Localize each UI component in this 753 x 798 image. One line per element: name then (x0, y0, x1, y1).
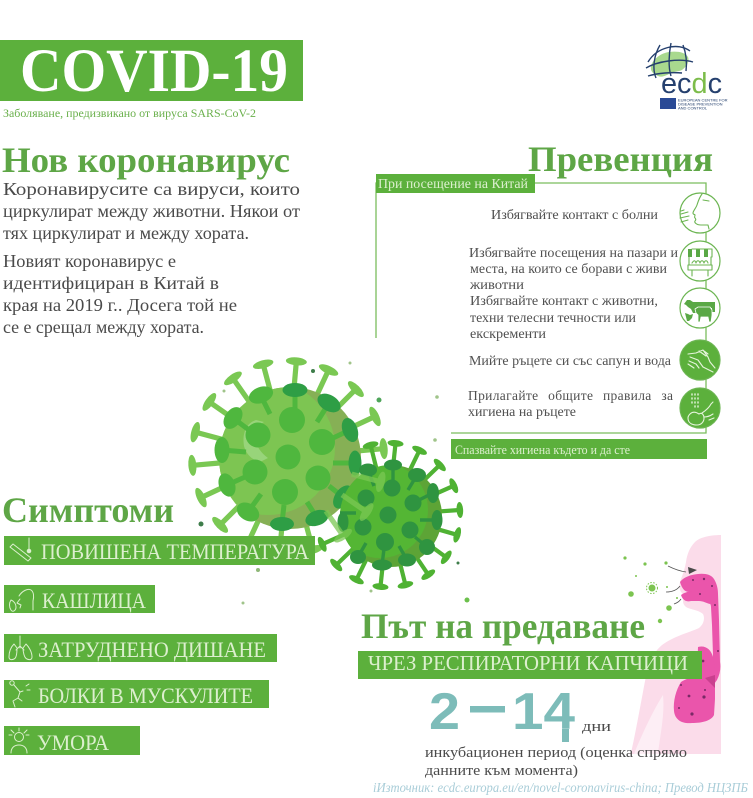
symptom: muscle pain: БОЛКИ В МУСКУЛИТЕ (38, 683, 253, 708)
decorative virus: large (187, 356, 389, 558)
title banner: COVID-19 (20, 38, 288, 105)
advice: avoid the sick: Избягвайте контакт с болни (491, 207, 658, 222)
icon: sneezing face (680, 193, 720, 233)
stat: incubation days (429, 683, 611, 742)
logo: ECDC: AND CONTROL (678, 106, 708, 110)
advice: animals: екскременти (470, 326, 546, 341)
subtitle: Заболяване, предизвикано от вируса SARS-CoV-2 (3, 108, 256, 120)
inhalation arrows (668, 566, 686, 572)
footer strip: Спазвайте хигиена където и да сте (455, 442, 630, 457)
text block: about coronaviruses (3, 179, 300, 243)
heading: new coronavirus: Нов коронавирус (2, 140, 290, 180)
icon: body in pain (10, 681, 30, 707)
stat: incubation days: 14 (512, 683, 575, 741)
heading: prevention: Превенция (528, 139, 713, 179)
airways (674, 574, 720, 723)
advice: markets (469, 245, 678, 292)
logo: ECDC (646, 43, 728, 110)
advice: markets: Избягвайте посещения на пазари и (469, 245, 678, 260)
icon: washing hands (680, 340, 720, 380)
text block: new virus: края на 2019 г.. Досега той не (3, 295, 237, 315)
icon: lungs (9, 636, 32, 660)
advice: markets: животни (469, 277, 524, 292)
symptom: cough: КАШЛИЦА (42, 588, 146, 613)
text block: new virus: Новият коронавирус е (3, 251, 176, 271)
logo: ECDC: ecdc (661, 68, 722, 100)
text block: incubation period: инкубационен период (оценка спрямо (425, 745, 687, 761)
heading: transmission: Път на предаване (361, 606, 645, 646)
icon: tired person (9, 728, 29, 753)
symptom: fatigue (4, 726, 140, 755)
transmission banner: ЧРЕЗ РЕСПИРАТОРНИ КАПЧИЦИ (368, 651, 688, 675)
text block: new virus: се е срещал между хората. (3, 317, 204, 337)
advice: animals (470, 293, 658, 341)
logo: ECDC: EUROPEAN CENTRE FOR (678, 98, 728, 102)
icon: thermometer (10, 538, 31, 561)
virus particles in lungs (678, 578, 719, 716)
advice: hand hygiene: Прилагайте общите правила за (468, 388, 673, 403)
advice: markets: места, на които се борави с живи (470, 261, 667, 276)
droplets (623, 556, 678, 623)
advice: animals: Избягвайте контакт с животни, (470, 293, 658, 308)
text block: new virus (3, 251, 237, 337)
advice: hand hygiene: хигиена на ръцете (468, 404, 576, 419)
footer strip (451, 439, 707, 459)
text block: about coronaviruses: Коронавирусите са вируси, които (3, 179, 300, 199)
icon: washing vegetables (680, 388, 720, 428)
text block: incubation period: данните към момента) (425, 763, 578, 779)
symptom: fatigue: УМОРА (37, 730, 109, 755)
panel: prevention (376, 174, 720, 459)
illustration: person with respiratory tract (623, 535, 721, 754)
icon: farm animals (680, 288, 720, 328)
symptom: fever: ПОВИШЕНА ТЕМПЕРАТУРА (41, 539, 309, 564)
text block: about coronaviruses: циркулират между животни. Някои от (3, 201, 300, 221)
text block: about coronaviruses: тях циркулират и между хората. (3, 223, 249, 243)
advice: animals: техни телесни течности или (470, 310, 636, 325)
decorative virus: small (316, 439, 464, 591)
text block: incubation period (425, 745, 687, 779)
text block: new virus: идентифициран в Китай в (3, 273, 219, 293)
stat: incubation days: дни (582, 719, 611, 735)
scattered dots (198, 362, 470, 604)
advice: hand hygiene (468, 388, 673, 419)
icon: market stall (680, 241, 720, 281)
panel header: При посещение на Китай (378, 176, 528, 191)
logo: ECDC: DISEASE PREVENTION (678, 102, 723, 106)
symptom: shortness of breath: ЗАТРУДНЕНО ДИШАНЕ (38, 637, 266, 662)
symptom: cough (4, 585, 155, 613)
stat: incubation days: 2 (429, 683, 460, 741)
icon: coughing head (10, 589, 34, 611)
heading: symptoms: Симптоми (2, 490, 174, 530)
advice: wash hands: Мийте ръцете си със сапун и вода (469, 353, 671, 368)
